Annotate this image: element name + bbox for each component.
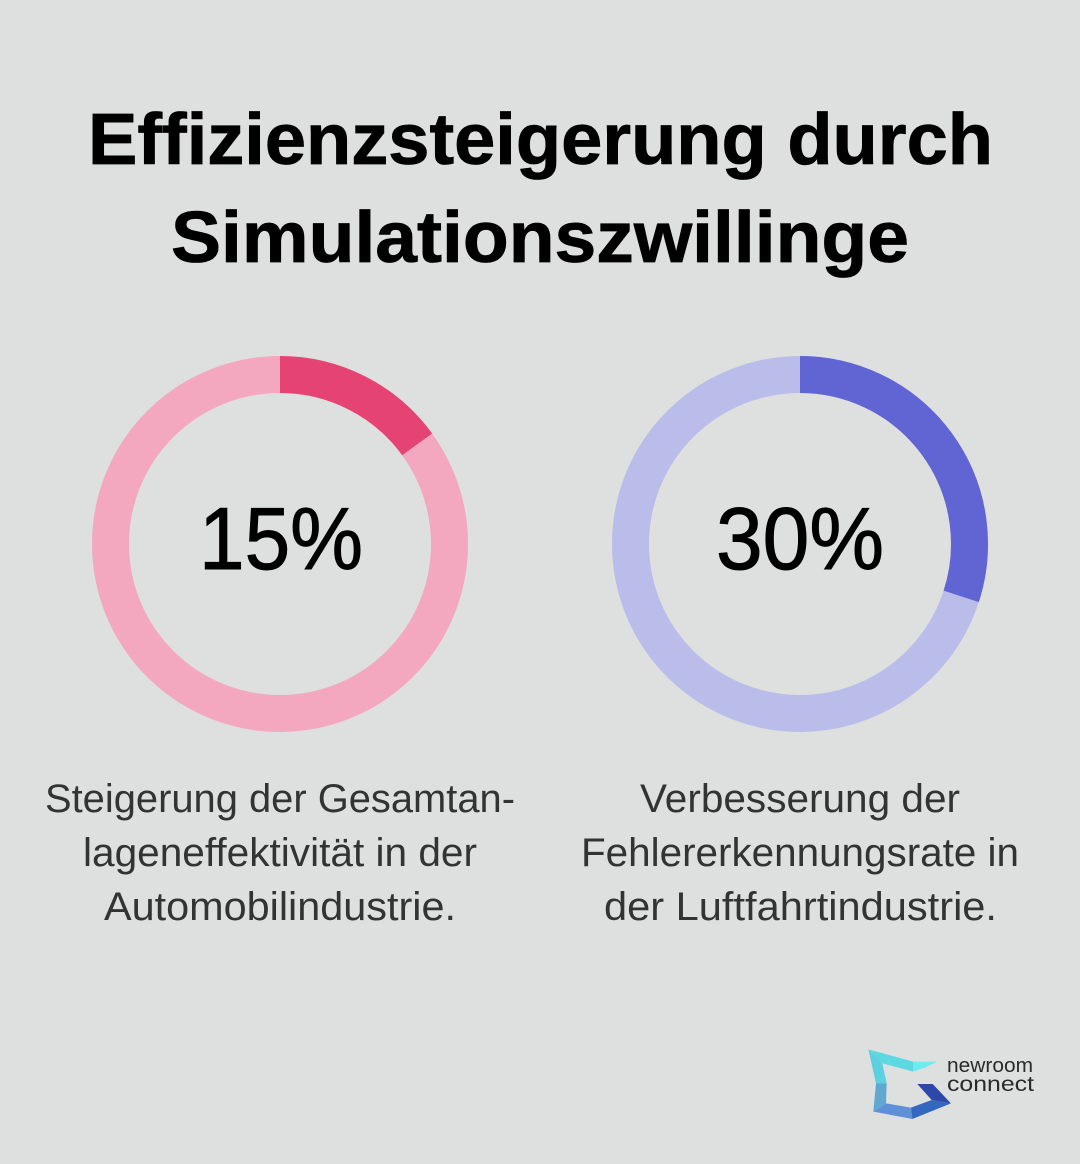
description: automotive: Steigerung der Gesamtan- <box>45 777 515 821</box>
title <box>88 100 993 278</box>
icon: logo mark <box>868 1049 951 1119</box>
description: automotive: Automobilindustrie. <box>104 885 456 929</box>
logo wordmark: connect <box>947 1073 1034 1096</box>
description: aviation: der Luftfahrtindustrie. <box>604 885 997 929</box>
value: 15%: 15% <box>199 489 363 588</box>
logo wordmark <box>947 1055 1034 1096</box>
description: aviation <box>581 777 1019 929</box>
description: aviation: Fehlererkennungsrate in <box>581 831 1019 875</box>
title: Simulationszwillinge <box>171 198 909 278</box>
logo: newroom connect <box>868 1049 1034 1119</box>
donut chart: 30% <box>630 374 970 714</box>
panel: aviation metric <box>581 374 1019 929</box>
title: Effizienzsteigerung durch <box>88 100 993 180</box>
donut chart: 15% <box>110 374 450 714</box>
description: automotive <box>45 777 515 929</box>
value: 30%: 30% <box>716 489 884 588</box>
logo wordmark: newroom <box>947 1055 1033 1077</box>
description: automotive: lageneffektivität in der <box>83 831 477 875</box>
panel: automotive metric <box>45 374 515 929</box>
description: aviation: Verbesserung der <box>640 777 960 821</box>
